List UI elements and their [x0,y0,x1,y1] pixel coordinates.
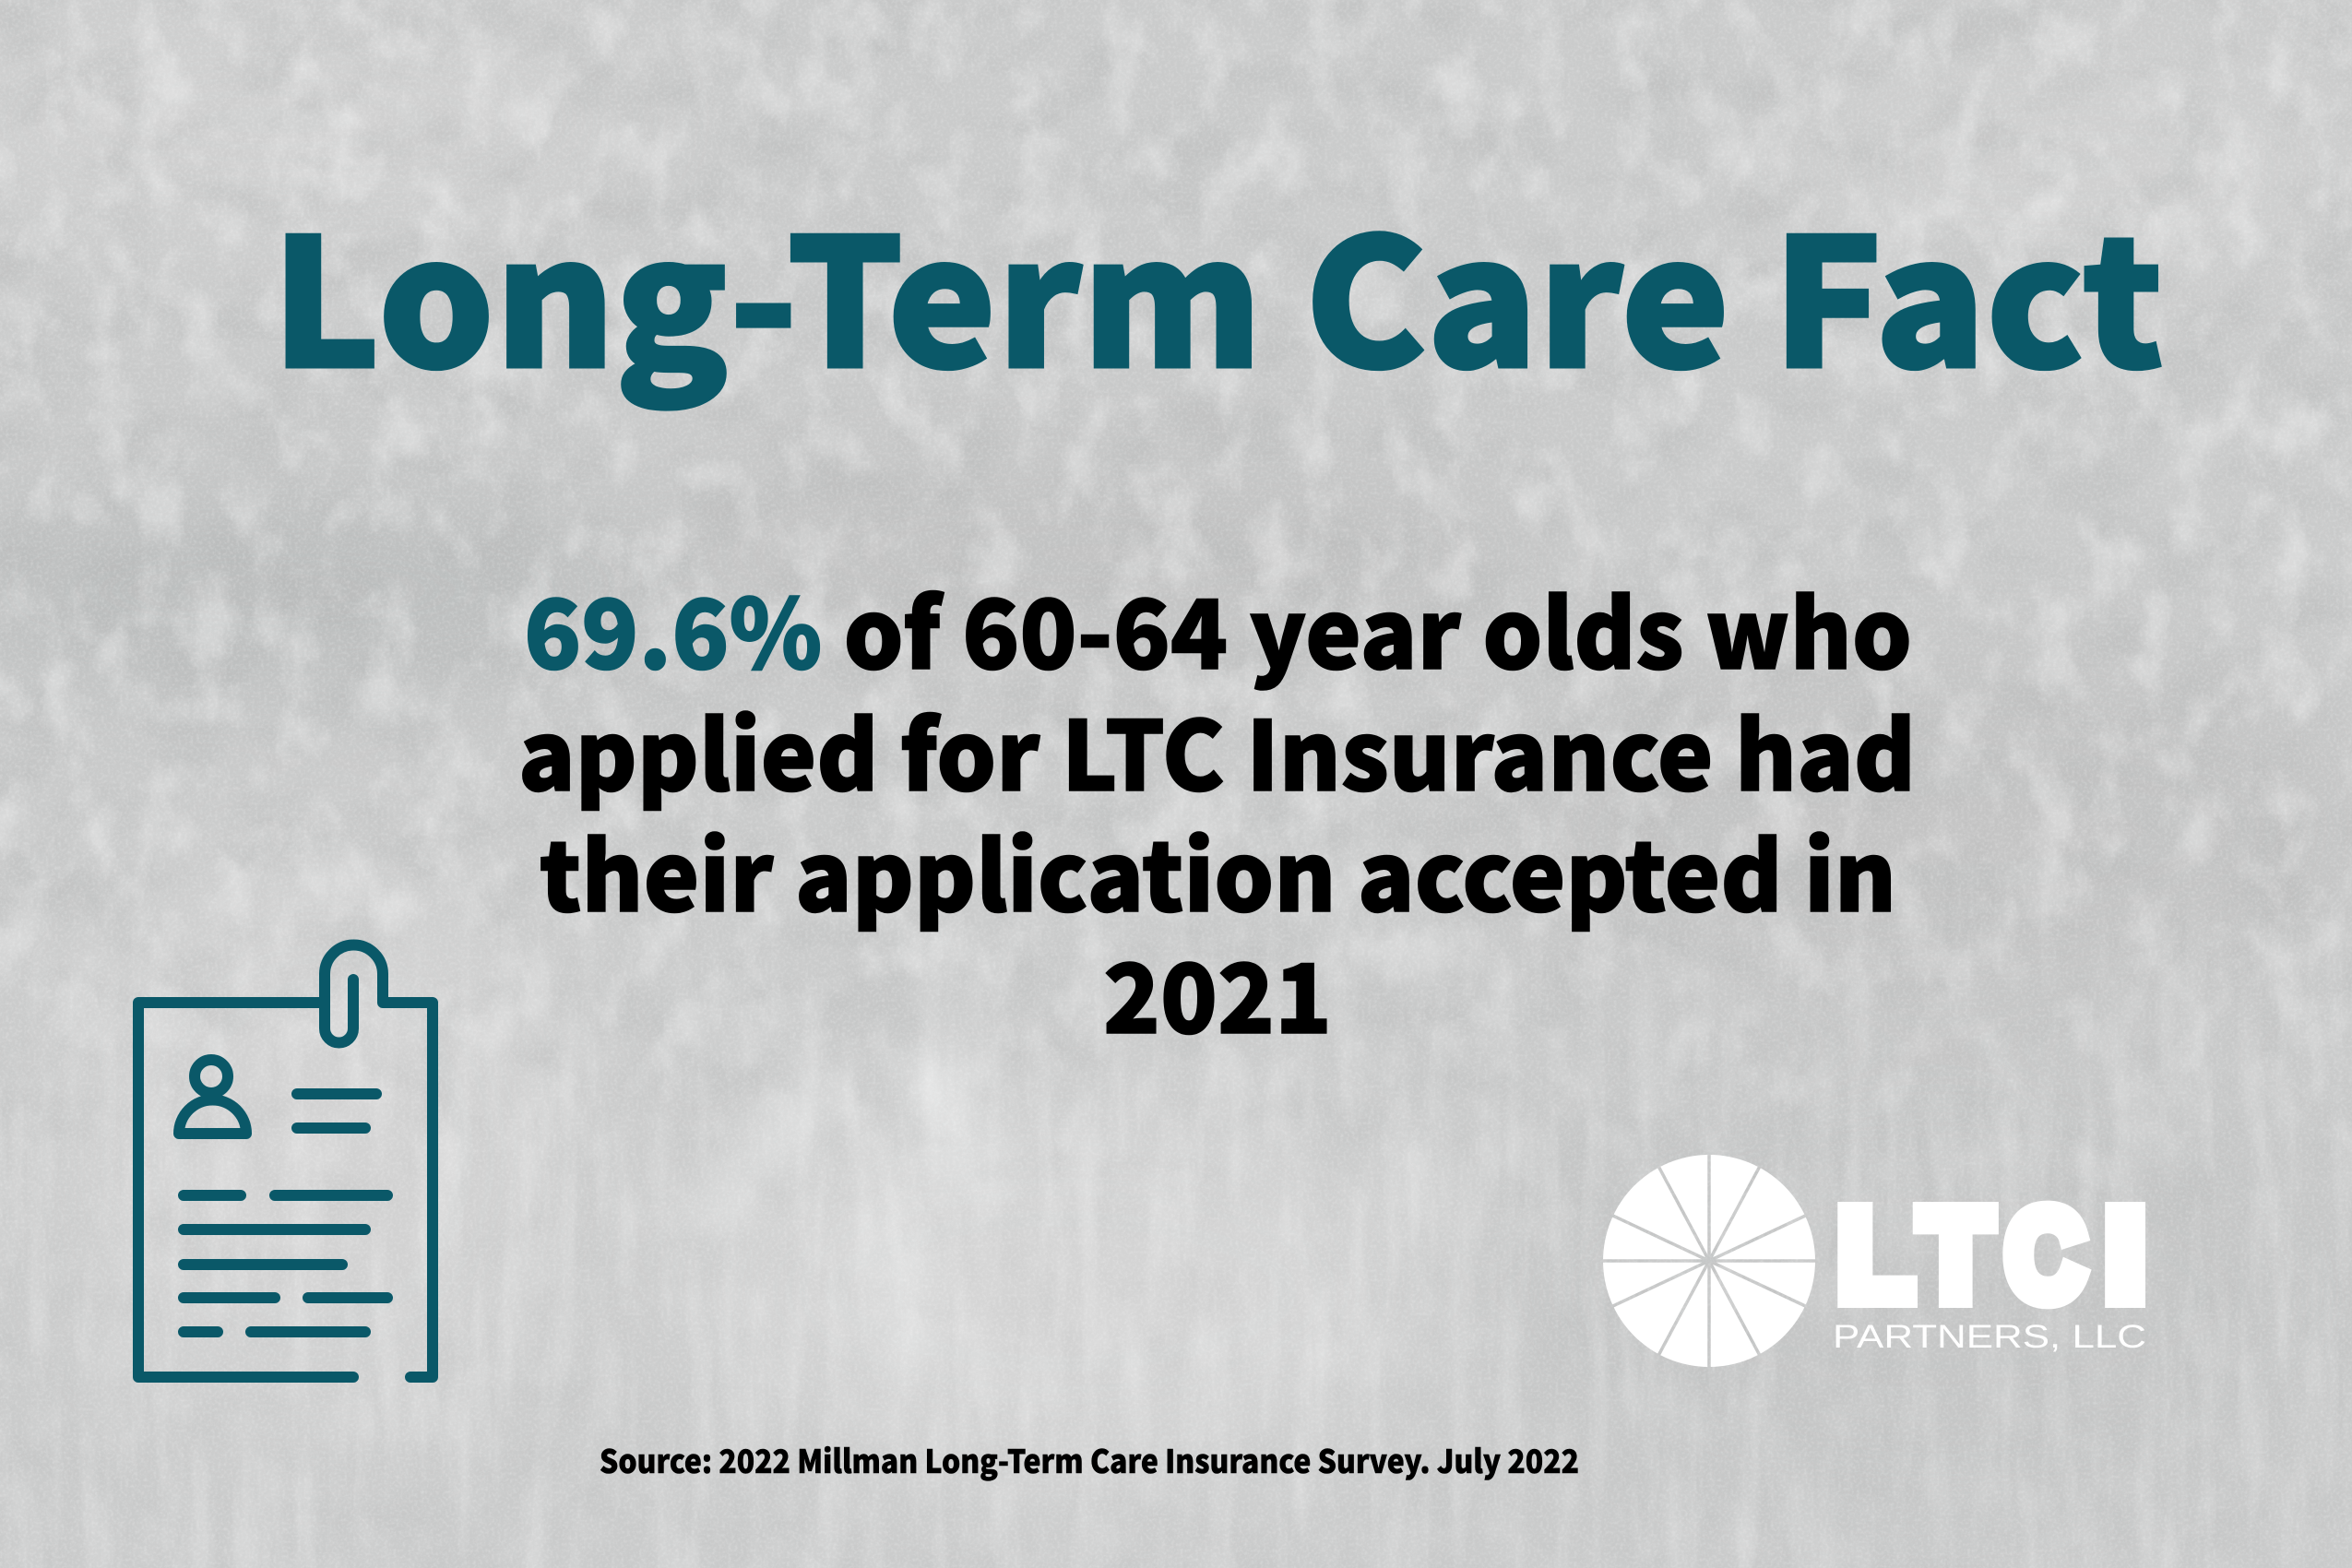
logo wordmark: I [2106,1183,2144,1325]
logo wheel [1603,1155,1815,1367]
logo wordmark [1838,1183,2144,1326]
line 4: 2021 [1103,921,1332,1061]
source note: Source: 2022 Millman Long-Term Care Insurance Survey. July 2022 [600,1436,1579,1483]
icon: document with paperclip and profile [138,944,433,1377]
line 3: their application accepted in [540,800,1896,939]
title: Long-Term Care Fact [271,160,2164,419]
line 2: applied for LTC Insurance had [518,679,1916,818]
main statement [518,557,1916,1061]
logo wordmark: C [2006,1184,2085,1326]
logo: LTCI Partners, LLC [1596,1148,2146,1374]
line 1 with highlighted percentage: 69.6% of 60-64 year olds who [524,557,1912,696]
logo wordmark: L [1838,1183,1913,1326]
logo wordmark: T [1920,1184,1991,1326]
logo subtitle: PARTNERS, LLC [1833,1319,2146,1355]
